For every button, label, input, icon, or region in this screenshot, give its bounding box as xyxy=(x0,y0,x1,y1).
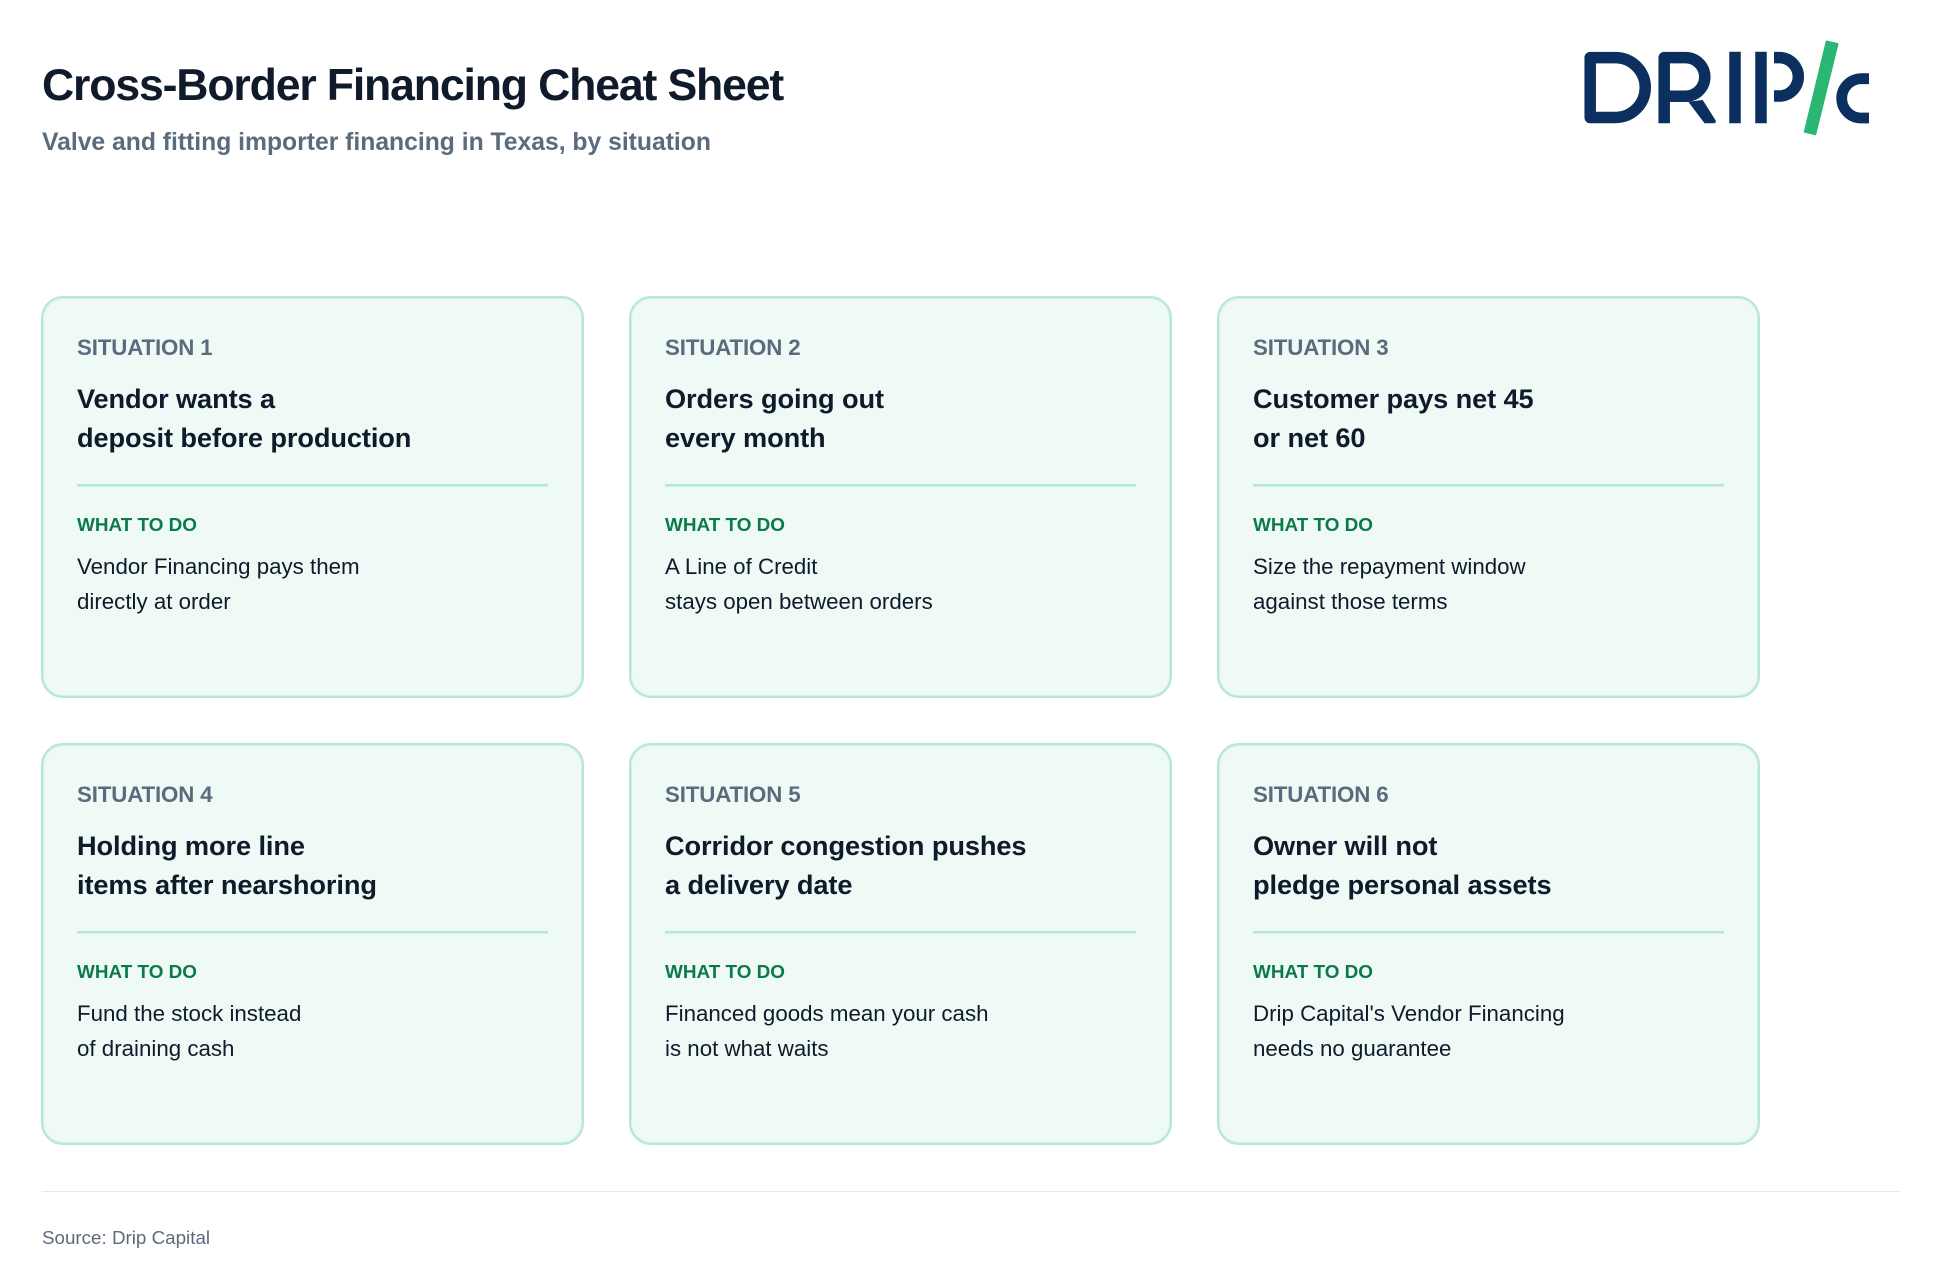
panel: situation 4: SITUATION 4 xyxy=(77,782,212,807)
logo: Drip Capital xyxy=(1584,40,1869,136)
panel: situation 3: WHAT TO DO xyxy=(1253,515,1373,536)
panel: situation 4: of draining cash xyxy=(77,1036,234,1060)
panel: situation 5: Corridor congestion pushes xyxy=(665,830,1026,861)
panel: situation 3 xyxy=(1217,296,1760,698)
panel: situation 4: Fund the stock instead xyxy=(77,1000,301,1026)
panel: situation 6: pledge personal assets xyxy=(1253,869,1552,900)
panel: situation 1: WHAT TO DO xyxy=(77,515,197,536)
panel: situation 6: SITUATION 6 xyxy=(1253,782,1388,807)
panel: situation 1: directly at order xyxy=(77,588,231,614)
panel: situation 1: SITUATION 1 xyxy=(77,335,212,360)
panel: situation 3: or net 60 xyxy=(1253,422,1365,453)
panel: situation 4: items after nearshoring xyxy=(77,869,377,900)
panel: situation 1 xyxy=(41,296,584,698)
panel: situation 4: Holding more line xyxy=(77,830,305,861)
panel: situation 3: Size the repayment window xyxy=(1253,554,1526,578)
panel: situation 5: is not what waits xyxy=(665,1036,829,1060)
panel: situation 2 xyxy=(629,296,1172,698)
panel: situation 6: needs no guarantee xyxy=(1253,1036,1451,1060)
panel: situation 2: WHAT TO DO xyxy=(665,515,785,536)
panel: situation 1: Vendor Financing pays them xyxy=(77,554,360,578)
panel: situation 4: WHAT TO DO xyxy=(77,962,197,983)
panel: situation 2: SITUATION 2 xyxy=(665,335,800,360)
source note: Source: Drip Capital xyxy=(42,1226,210,1248)
panel: situation 5: Financed goods mean your cash xyxy=(665,1000,989,1026)
panel: situation 5: SITUATION 5 xyxy=(665,782,800,807)
panel: situation 3: against those terms xyxy=(1253,588,1448,614)
title: Cross-Border Financing Cheat Sheet xyxy=(42,61,783,110)
panel: situation 5: a delivery date xyxy=(665,869,852,900)
panel: situation 2: Orders going out xyxy=(665,383,884,414)
panel: situation 3: SITUATION 3 xyxy=(1253,335,1388,360)
panel: situation 1: deposit before production xyxy=(77,422,411,453)
panel: situation 5 xyxy=(629,743,1172,1145)
panel: situation 6: Owner will not xyxy=(1253,830,1437,861)
panel: situation 6: WHAT TO DO xyxy=(1253,962,1373,983)
panel: situation 6: Drip Capital's Vendor Financing xyxy=(1253,1000,1565,1026)
panel: situation 4 xyxy=(41,743,584,1145)
panel: situation 2: every month xyxy=(665,422,826,453)
panel: situation 3: Customer pays net 45 xyxy=(1253,383,1534,414)
panel: situation 6 xyxy=(1217,743,1760,1145)
panel: situation 2: A Line of Credit xyxy=(665,554,817,578)
subtitle: Valve and fitting importer financing in Texas, by situation xyxy=(42,129,711,156)
panel: situation 1: Vendor wants a xyxy=(77,383,275,414)
panel: situation 2: stays open between orders xyxy=(665,588,933,614)
panel: situation 5: WHAT TO DO xyxy=(665,962,785,983)
